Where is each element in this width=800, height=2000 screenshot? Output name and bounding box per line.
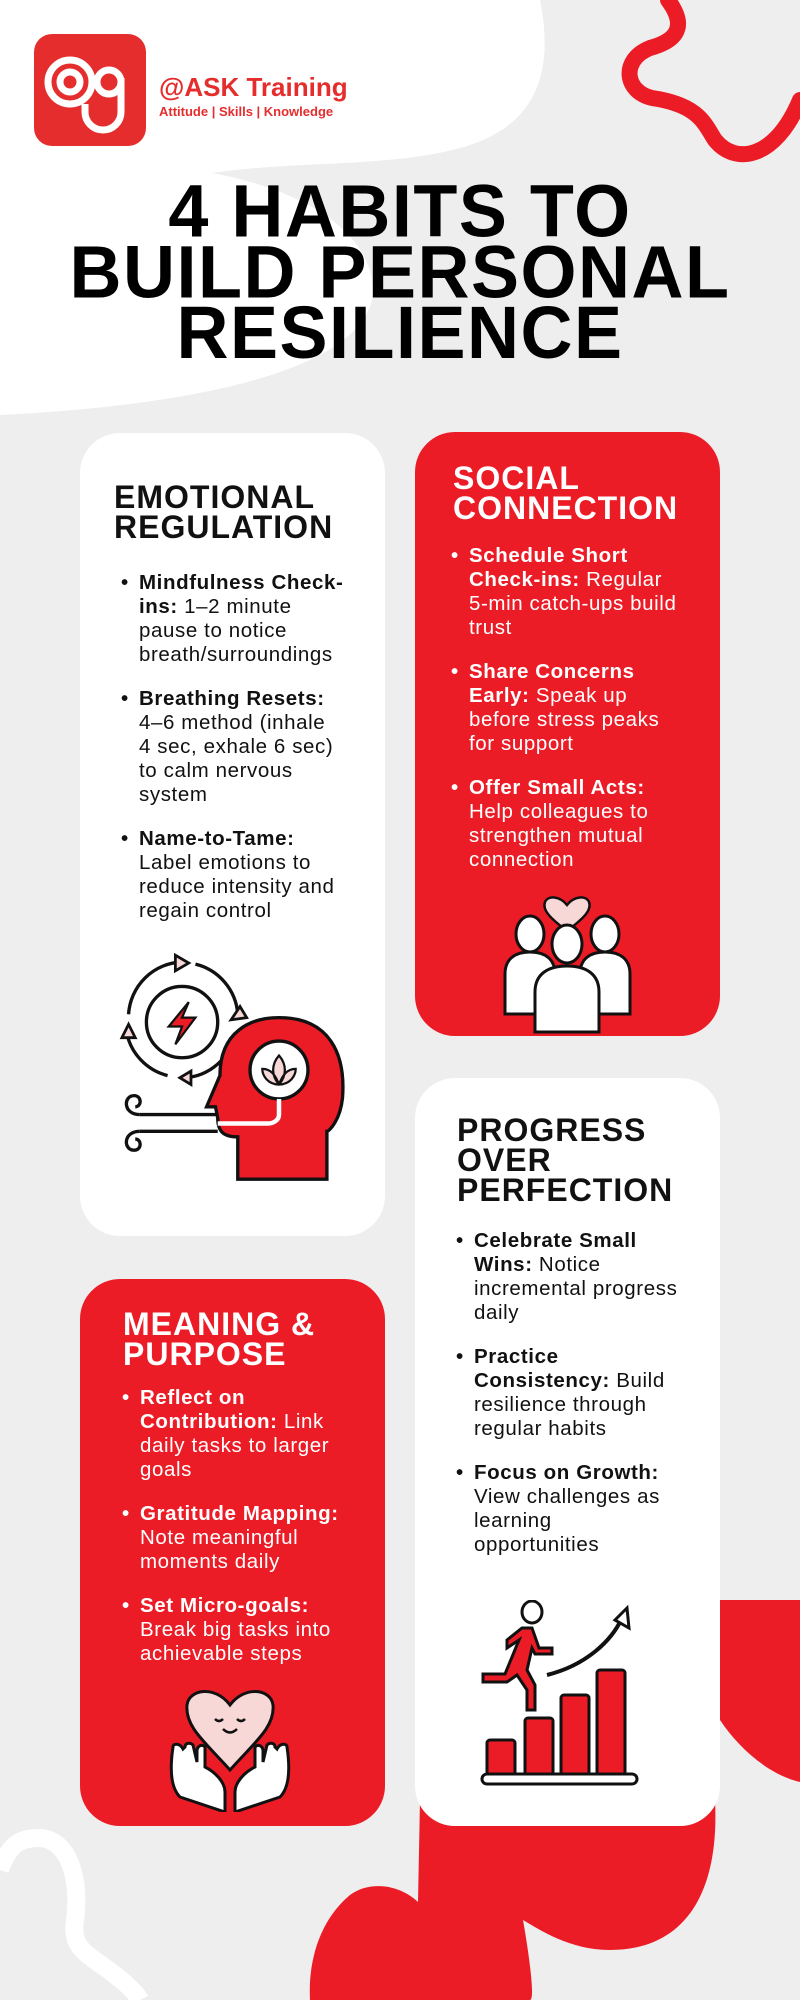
bullet list: before stress peaks [469, 708, 659, 731]
bullet list: breath/surroundings [139, 643, 333, 666]
bullet list: for support [469, 732, 574, 755]
heading: EMOTIONAL [114, 479, 315, 515]
bullet list: Gratitude Mapping: [140, 1502, 339, 1525]
icon: head with lotus and cycle [120, 953, 345, 1181]
bullet list: ins: 1–2 minute [139, 595, 292, 618]
bullet list: opportunities [474, 1533, 599, 1556]
bullet list: trust [469, 616, 512, 639]
heading: CONNECTION [453, 490, 678, 526]
heading [453, 460, 678, 526]
bullet list [452, 544, 676, 871]
heading [123, 1306, 315, 1372]
title: BUILD PERSONAL [69, 231, 731, 314]
bullet list: goals [140, 1458, 192, 1481]
icon: logo mark [34, 34, 146, 146]
bullet list: learning [474, 1509, 552, 1532]
bullet list: Help colleagues to [469, 800, 648, 823]
bullet list: Label emotions to [139, 851, 311, 874]
icon: runner on rising bars [480, 1600, 638, 1786]
bullet list: 4–6 method (inhale [139, 711, 325, 734]
bullet list: Early: Speak up [469, 684, 627, 707]
bullet list: reduce intensity and [139, 875, 334, 898]
bullet list [122, 1386, 339, 1665]
bullet list: Note meaningful [140, 1526, 298, 1549]
bullet list: system [139, 783, 208, 806]
bullet list: to calm nervous [139, 759, 293, 782]
bullet list: Set Micro-goals: [140, 1594, 309, 1617]
bullet list: Mindfulness Check- [139, 571, 343, 594]
icon: heart in hands [170, 1690, 290, 1812]
heading: REGULATION [114, 509, 333, 545]
icon: group with heart [504, 896, 632, 1034]
bullet list: Wins: Notice [474, 1253, 601, 1276]
heading: SOCIAL [453, 460, 580, 496]
panel: progress over perfection [415, 1078, 720, 1826]
bullet list: Focus on Growth: [474, 1461, 659, 1484]
brand name: @ASK Training [159, 72, 348, 102]
heading: MEANING & [123, 1306, 315, 1342]
bullet list: Offer Small Acts: [469, 776, 645, 799]
bullet list: incremental progress [474, 1277, 677, 1300]
bullet list: Reflect on [140, 1386, 245, 1409]
bullet list: strengthen mutual [469, 824, 643, 847]
bullet list: Breathing Resets: [139, 687, 325, 710]
heading: PERFECTION [457, 1172, 673, 1208]
bullet list: Share Concerns [469, 660, 635, 683]
panel: emotional regulation [80, 433, 385, 1236]
bullet list: 5-min catch-ups build [469, 592, 676, 615]
bullet list: resilience through [474, 1393, 647, 1416]
heading: OVER [457, 1142, 552, 1178]
bullet list: regain control [139, 899, 272, 922]
title: 4 HABITS TO [168, 171, 632, 253]
bullet list: regular habits [474, 1417, 607, 1440]
panel: social connection [415, 432, 720, 1036]
title [69, 171, 731, 375]
bullet list: 4 sec, exhale 6 sec) [139, 735, 333, 758]
bullet list: pause to notice [139, 619, 287, 642]
bullet list: moments daily [140, 1550, 280, 1573]
heading [457, 1112, 673, 1208]
bullet list [456, 1229, 677, 1556]
bullet list: daily tasks to larger [140, 1434, 329, 1457]
heading: PROGRESS [457, 1112, 646, 1148]
bullet list: Practice [474, 1345, 559, 1368]
bullet list [122, 571, 343, 922]
title: RESILIENCE [176, 292, 624, 375]
bullet list: Contribution: Link [140, 1410, 324, 1433]
tagline: Attitude | Skills | Knowledge [159, 104, 333, 119]
panel: meaning and purpose [80, 1279, 385, 1826]
bullet list: achievable steps [140, 1642, 302, 1665]
bullet list: Break big tasks into [140, 1618, 331, 1641]
bullet list: connection [469, 848, 574, 871]
heading: PURPOSE [123, 1336, 286, 1372]
bullet list: Celebrate Small [474, 1229, 637, 1252]
bullet list: Consistency: Build [474, 1369, 665, 1392]
bullet list: View challenges as [474, 1485, 660, 1508]
bullet list: Check-ins: Regular [469, 568, 662, 591]
logo [34, 34, 348, 146]
bullet list: Schedule Short [469, 544, 628, 567]
heading [114, 479, 333, 545]
bullet list: Name-to-Tame: [139, 827, 294, 850]
bullet list: daily [474, 1301, 519, 1324]
